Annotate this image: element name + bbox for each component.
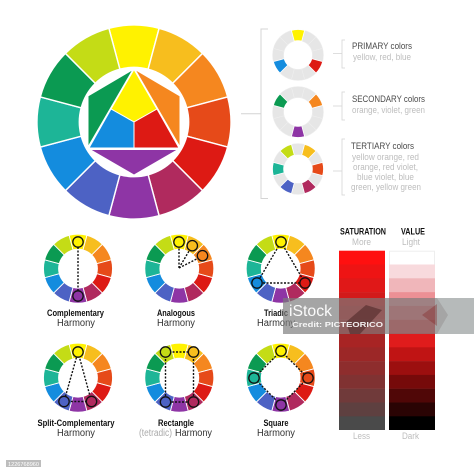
main color wheel: [37, 25, 231, 219]
primary bracket: [333, 40, 345, 68]
secondary colors wheel: [273, 87, 323, 137]
split-complementary harmony wheel: [44, 343, 112, 412]
image id badge: 1226768960: [8, 462, 39, 468]
main bracket: [241, 29, 268, 198]
analogous label: Harmony: [157, 318, 195, 329]
value scale: [389, 251, 435, 430]
rectangle label: [139, 418, 212, 439]
rectangle label: Rectangle: [158, 418, 194, 429]
rectangle label: Harmony: [175, 428, 212, 439]
primary label: [352, 41, 412, 62]
square label: [257, 418, 295, 439]
complementary label: Harmony: [57, 318, 95, 329]
secondary label: SECONDARY colors: [352, 94, 425, 104]
tertiary label: orange, red violet,: [353, 162, 418, 172]
tertiary label: yellow orange, red: [352, 152, 419, 162]
rectangle label: (tetradic): [139, 428, 172, 439]
watermark band: [283, 298, 474, 334]
value heading: VALUE: [401, 226, 425, 236]
split-complementary label: Harmony: [57, 428, 95, 439]
secondary label: [352, 94, 425, 115]
complementary harmony wheel: [44, 234, 112, 303]
watermark band: iStock: [289, 303, 333, 320]
scale footers: Dark: [402, 431, 419, 441]
value heading: [401, 226, 425, 247]
analogous label: [157, 308, 195, 329]
value heading: Light: [402, 237, 420, 247]
secondary bracket: [333, 92, 345, 120]
complementary label: Complementary: [47, 308, 105, 319]
complementary label: [47, 308, 105, 329]
analogous harmony wheel: [145, 234, 214, 303]
tertiary bracket: [333, 139, 345, 195]
triadic label: [257, 308, 295, 329]
saturation heading: SATURATION: [340, 226, 386, 236]
analogous label: Analogous: [157, 308, 195, 319]
split-complementary label: Split-Complementary: [38, 418, 115, 429]
scale footers: [353, 431, 419, 441]
image id badge: [6, 460, 41, 468]
saturation scale: [339, 251, 385, 430]
tertiary label: [351, 141, 421, 192]
triadic label: Triadic: [264, 308, 288, 319]
square label: Harmony: [257, 428, 295, 439]
center hexagon: [88, 70, 180, 175]
triadic label: Harmony: [257, 318, 295, 329]
saturation heading: More: [352, 237, 371, 247]
primary colors wheel: [273, 30, 323, 80]
tertiary label: TERTIARY colors: [351, 141, 414, 151]
split-complementary label: [38, 418, 115, 439]
rectangle harmony wheel: [145, 343, 214, 412]
tertiary colors wheel: [273, 144, 323, 194]
square harmony wheel: [246, 343, 315, 412]
secondary label: orange, violet, green: [352, 105, 425, 115]
scale footers: Less: [353, 431, 370, 441]
saturation heading: [340, 226, 386, 247]
watermark band: Credit: PICTEORICO: [292, 320, 383, 329]
primary label: yellow, red, blue: [353, 52, 411, 62]
square label: Square: [264, 418, 288, 429]
tertiary label: green, yellow green: [351, 182, 421, 192]
triadic harmony wheel: [246, 234, 315, 303]
primary label: PRIMARY colors: [352, 41, 412, 51]
tertiary label: blue violet, blue: [357, 172, 414, 182]
